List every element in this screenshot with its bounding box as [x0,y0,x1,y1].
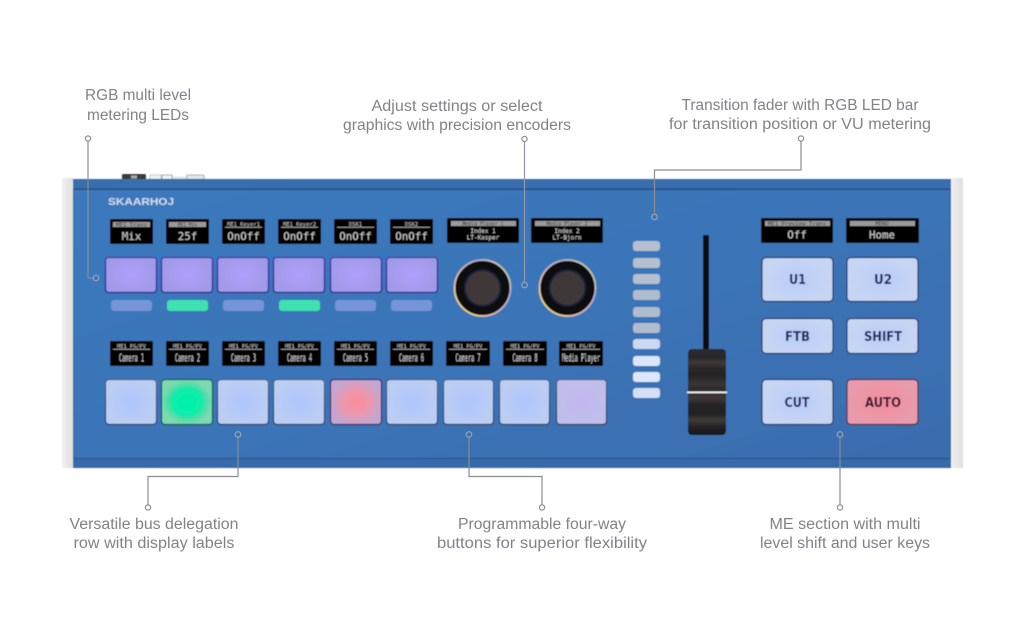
buttons: ME section [762,258,918,424]
button: SHIFT: SHIFT [864,329,903,345]
button: CUT: CUT [784,395,810,411]
callout: four-way buttons [437,432,647,552]
displays: camera row: ME1 PG/PV [229,344,259,350]
displays: camera row: Camera 3 [231,352,256,364]
displays: ME section: MENU [875,222,889,228]
displays: camera row: Camera 5 [343,352,368,364]
displays: camera row [110,341,603,366]
button: FTB [762,318,833,354]
displays: top row: DSK1 [349,222,362,228]
callout: precision encoders: Adjust settings or select [372,98,543,115]
displays: top row: 25f [178,230,197,243]
displays: camera row: ME1 PG/PV [117,344,147,350]
displays: camera row: ME1 PG/PV [566,344,596,350]
callout: transition fader: for transition position or VU metering [669,116,931,133]
displays: top row: OnOff [395,230,428,243]
displays: camera row: ME1 PG/PV [510,344,540,350]
displays: camera row: ME1 PG/PV [454,344,483,350]
button: FTB: FTB [785,329,810,345]
displays: top row: Media Player 2 [546,222,588,228]
encoder: right [540,260,596,316]
displays: top row: DSK2 [405,222,418,228]
callout: bus delegation row: row with display labels [74,535,235,552]
buttons: top row metering LEDs [106,258,438,292]
displays: camera row: Media Player [562,352,600,364]
displays: ME section: Home [869,228,895,242]
displays: camera row: Camera 7 [456,352,480,364]
button: SHIFT [847,318,918,354]
displays: camera row: Camera 8 [512,352,538,364]
panel: controller body [62,178,963,468]
displays: top row [110,218,603,244]
displays: camera row: ME1 PG/PV [397,344,427,350]
callout: ME section: ME section with multi [770,516,920,533]
button: AUTO [847,380,918,424]
callout: four-way buttons: Programmable four-way [458,516,626,533]
displays: camera row: ME1 PG/PV [341,344,371,350]
LED strips under top row [111,300,432,311]
displays: top row: Index 2 [554,228,580,235]
button: U1 [762,258,833,302]
callout: bus delegation row [70,432,241,552]
callout: RGB metering LEDs [85,87,191,281]
displays: ME section [761,218,919,243]
callout: four-way buttons: buttons for superior flexibility [437,535,647,552]
buttons: bus delegation row [106,380,606,424]
fader: slot and handle [687,235,727,435]
callout: ME section [760,432,930,552]
displays: top row: LT-Kasper [467,234,500,242]
displays: top row: ME1 Keyer1 [227,222,260,228]
button: AUTO: AUTO [865,395,901,411]
displays: top row: ME1 Mix [178,222,198,228]
callout: ME section: level shift and user keys [760,535,930,552]
displays: top row: ME1 Trans [116,222,147,228]
callout: RGB metering LEDs: RGB multi level [85,87,191,104]
callout: transition fader [652,97,931,220]
side rails [62,178,963,468]
displays: top row: Mix [122,230,142,243]
callout: transition fader: Transition fader with RGB LED bar [682,97,918,114]
callout: RGB metering LEDs: metering LEDs [87,107,189,124]
displays: camera row: Camera 2 [175,352,200,364]
displays: camera row: Camera 6 [399,352,424,364]
button: U2: U2 [874,272,892,288]
displays: top row: ME1 Keyer2 [283,222,316,228]
encoder: left [454,260,510,316]
displays: ME section: Off [787,228,807,242]
button: CUT [762,380,833,424]
displays: camera row: ME1 PG/PV [285,344,315,350]
button: U1: U1 [789,272,806,288]
callout: precision encoders: graphics with precision encoders [343,117,571,134]
displays: top row: LT-Bjorn [553,234,582,242]
displays: top row: OnOff [283,230,316,243]
LED bar: transition position [633,241,660,398]
displays: camera row: Camera 1 [119,352,144,364]
callout: bus delegation row: Versatile bus delegation [70,516,238,533]
displays: top row: OnOff [227,230,260,243]
callout: precision encoders [343,98,571,288]
displays: top row: Media Player 1 [462,222,504,228]
button: U2 [847,258,918,302]
device: rear connectors [122,174,205,180]
displays: top row: Index 1 [470,228,496,235]
displays: camera row: ME1 PG/PV [173,344,203,350]
displays: camera row: Camera 4 [287,352,312,364]
logo: SKAARHOJ: SKAARHOJ [108,197,174,208]
displays: ME section: ME1 Preview Trans [768,222,826,228]
displays: top row: OnOff [339,230,372,243]
